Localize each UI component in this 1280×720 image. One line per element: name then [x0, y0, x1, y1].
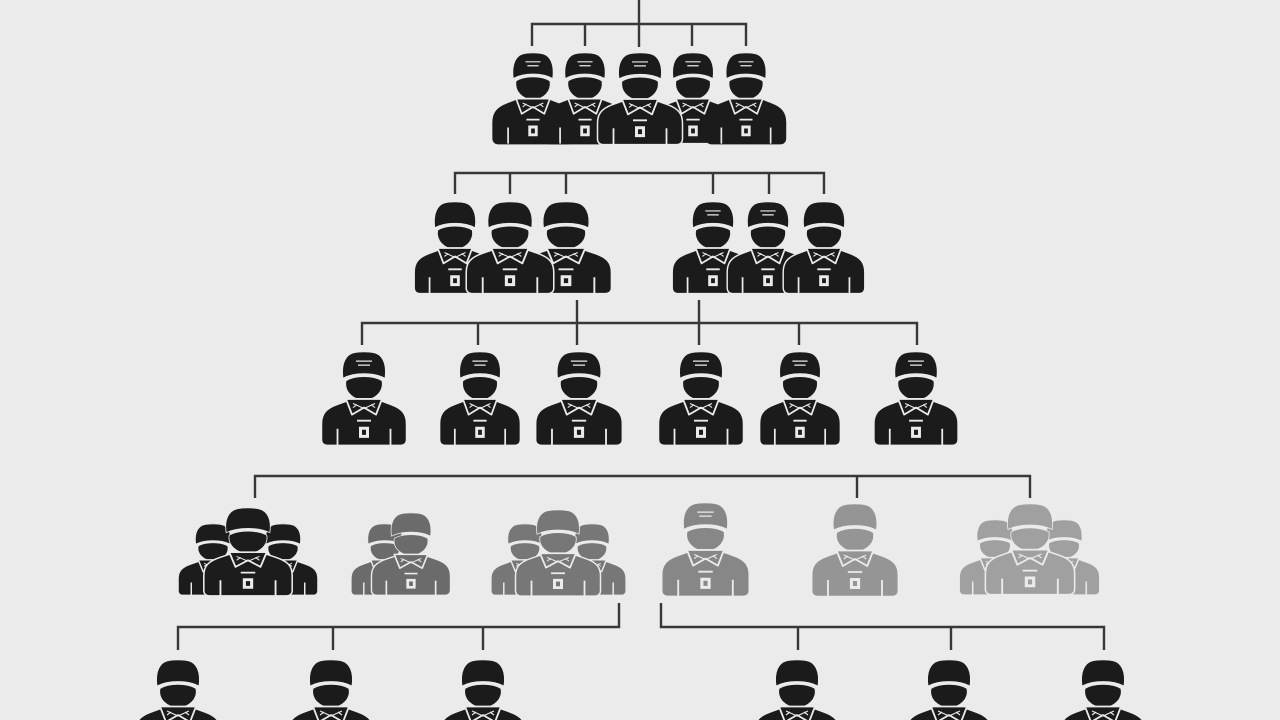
connector: row 1 to row 2	[455, 173, 824, 194]
icon: person left	[672, 202, 754, 294]
icon: person 1	[136, 660, 220, 720]
icon: row 4 light grey individual	[812, 504, 898, 596]
icon: side person	[351, 524, 419, 595]
icon: person 6	[1060, 660, 1146, 720]
icon: side person left	[491, 524, 559, 595]
group: row 4 dark grey team	[351, 513, 451, 595]
icon: person 2	[440, 352, 520, 445]
group: row 3 six individuals	[322, 352, 958, 445]
icon: centre person	[371, 513, 451, 595]
icon: person 4	[658, 352, 744, 445]
icon: side person left	[178, 524, 248, 595]
icon: person 6	[874, 352, 958, 445]
icon: person 5	[706, 53, 786, 144]
icon: person 3	[536, 352, 622, 445]
icon: person 3	[598, 53, 682, 145]
icon: person 1	[493, 53, 573, 144]
icon: person 4	[653, 53, 733, 144]
icon: row 4 grey individual	[662, 503, 749, 596]
group: row 4 mid grey team	[491, 510, 626, 596]
group: row 4 black team	[178, 508, 318, 596]
icon: person 1	[322, 352, 406, 445]
icon: person right	[783, 202, 865, 294]
group: row 1 team of five	[493, 53, 786, 145]
icon: person 5	[906, 660, 992, 720]
icon: person centre	[727, 202, 809, 294]
icon: person right	[521, 202, 611, 294]
icon: side person right	[248, 524, 318, 595]
icon: person 5	[760, 352, 840, 445]
icon: person 2	[545, 53, 625, 144]
icon: person 3	[440, 660, 526, 720]
icon: centre person	[985, 504, 1075, 595]
connector: row 4 left to row 5 left	[178, 603, 619, 650]
connector: row 2 to row 3	[362, 300, 917, 345]
icon: side person left	[959, 520, 1031, 595]
group: row 4 pale grey team	[959, 504, 1100, 595]
connector: top level to row 1	[532, 0, 746, 47]
icon: person left	[414, 202, 496, 294]
icon: person 4	[754, 660, 840, 720]
connector: row 4 right to row 5 right	[661, 603, 1104, 650]
icon: person 2	[288, 660, 374, 720]
connector: row 3 to row 4	[255, 476, 1030, 498]
icon: person centre	[466, 202, 554, 294]
icon: centre person	[516, 510, 600, 596]
icon: centre person	[204, 508, 292, 596]
icon: side person right	[1028, 520, 1100, 595]
group: row 2 left team	[414, 202, 611, 294]
icon: side person right	[558, 524, 626, 595]
group: row 2 right team	[672, 202, 865, 294]
group: row 5 right individuals	[754, 660, 1146, 720]
group: row 5 left individuals	[136, 660, 526, 720]
